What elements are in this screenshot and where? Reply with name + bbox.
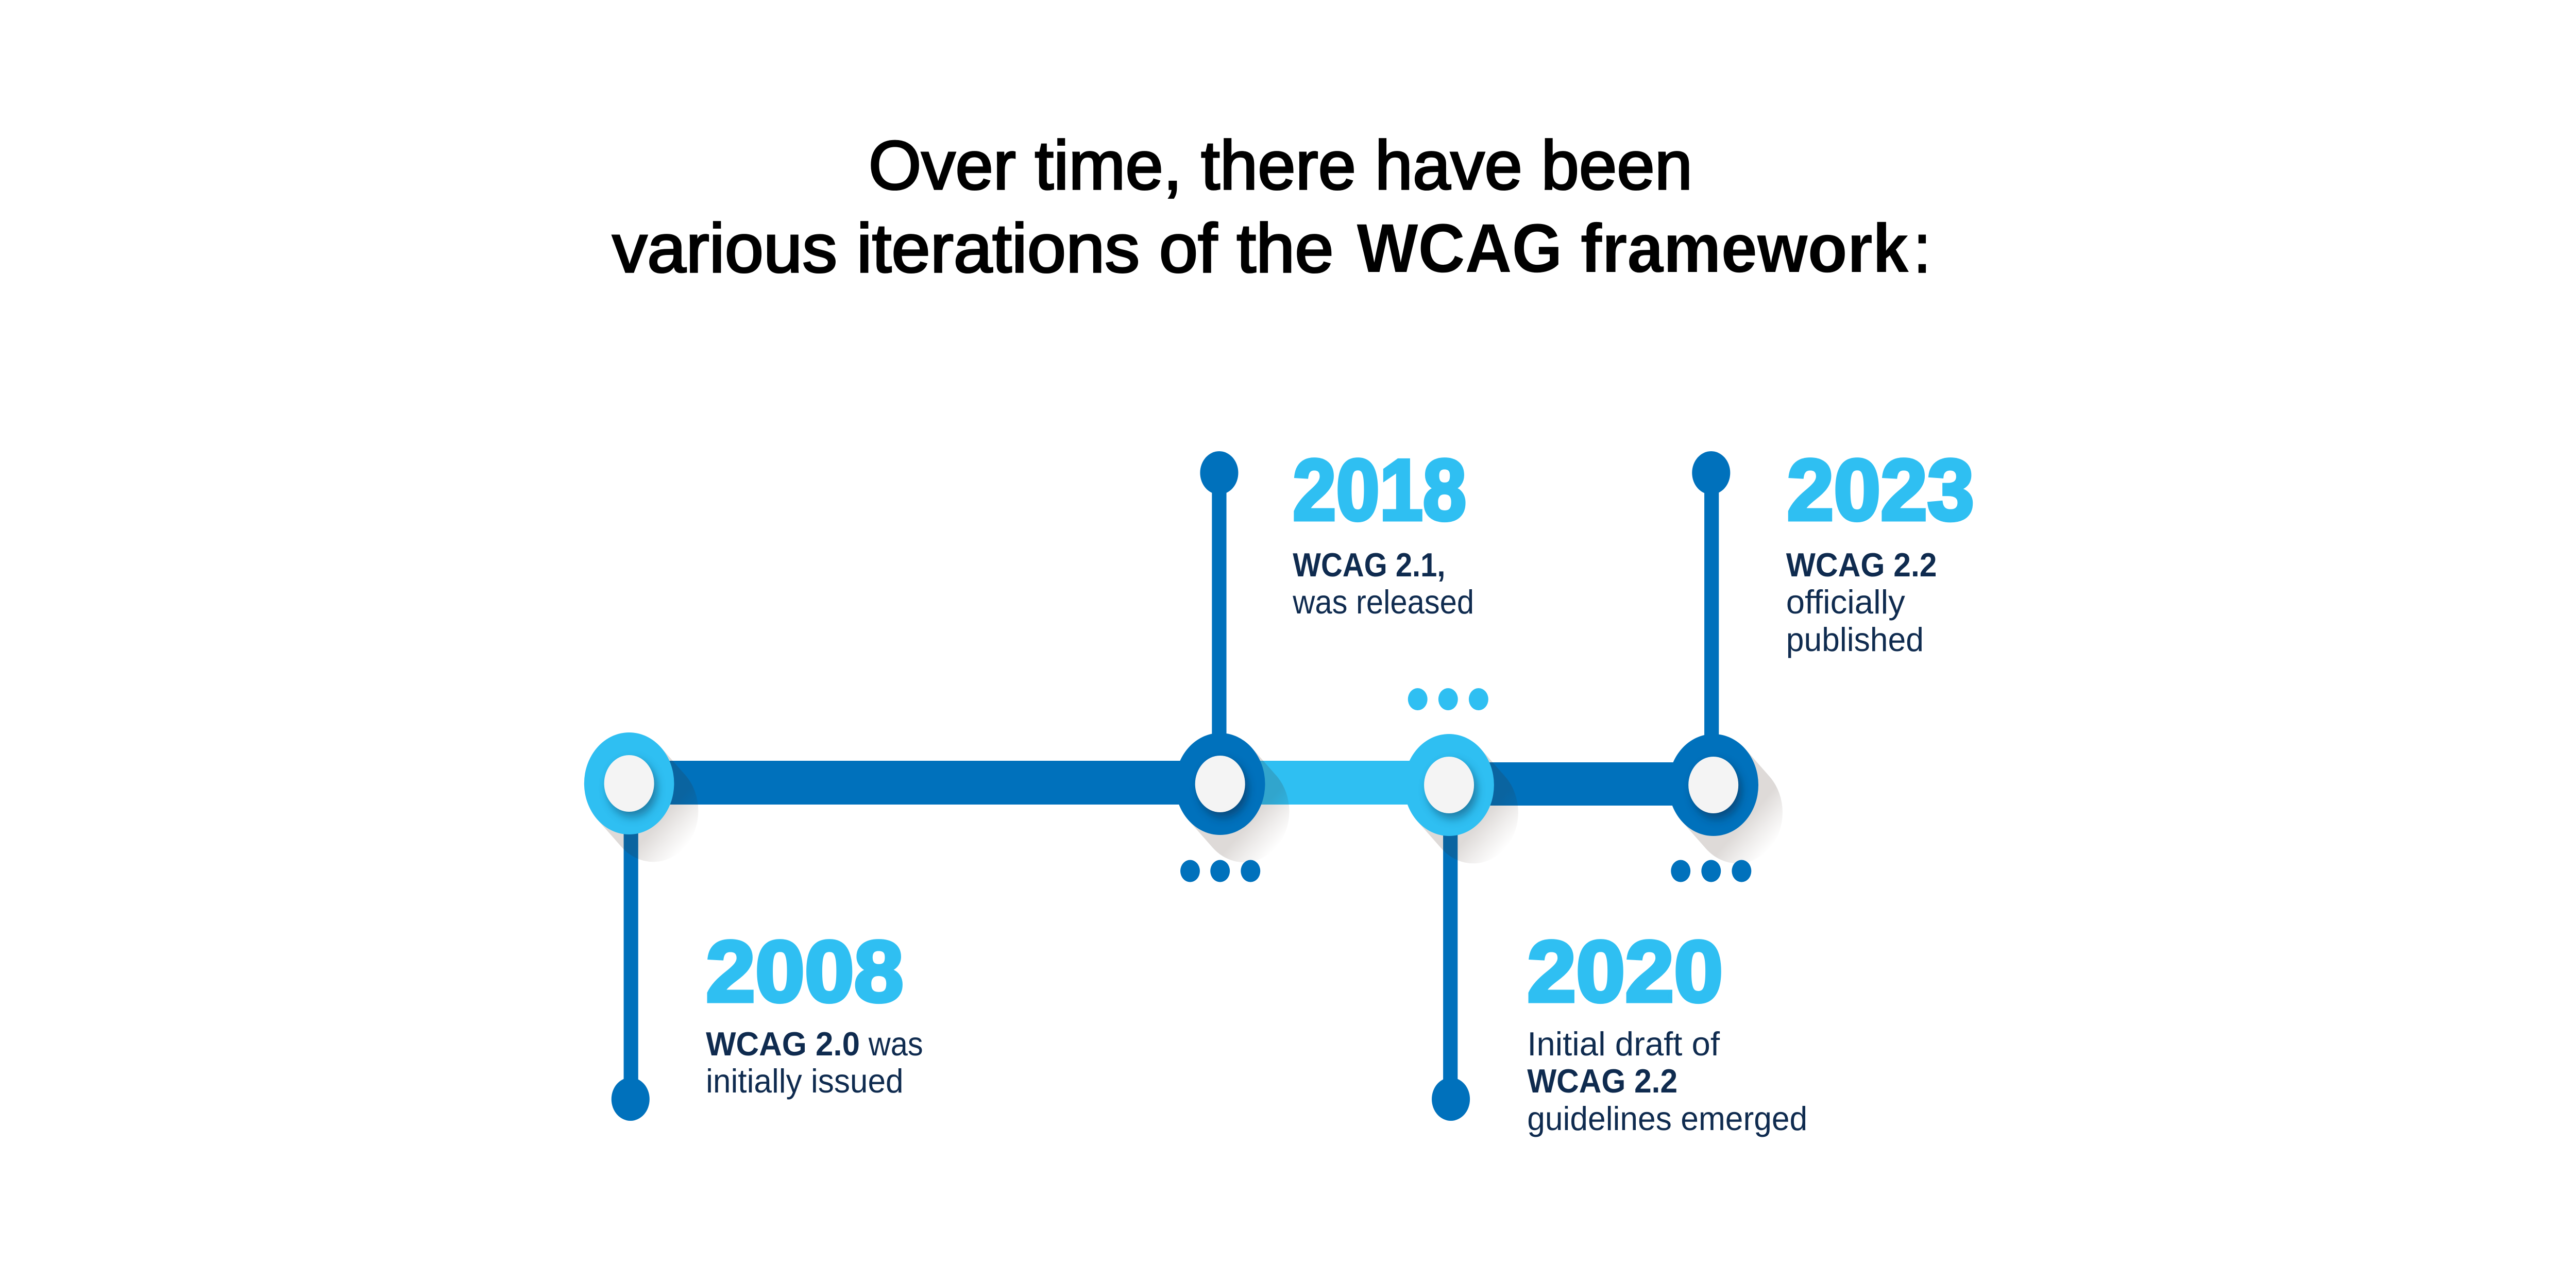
description: 2023 xyxy=(1786,546,1937,658)
year: 2018: 2018 xyxy=(1293,441,1466,538)
milestone: 2023 xyxy=(1786,441,1974,658)
description: 2008: initially issued xyxy=(706,1063,904,1100)
bar: 2018 to 2020 segment xyxy=(1220,761,1449,805)
description: 2020 xyxy=(1527,1026,1807,1137)
description: 2008: WCAG 2.0 xyxy=(706,1026,860,1063)
title xyxy=(613,127,1930,287)
node: 2023 xyxy=(1668,734,1783,863)
bar: 2020 to 2023 segment xyxy=(1449,762,1714,806)
dots: below 2023 node xyxy=(1671,860,1751,882)
milestone: 2018 xyxy=(1292,441,1474,621)
description: 2008 xyxy=(706,1026,923,1100)
bar: 2008 to 2018 segment xyxy=(629,761,1220,805)
stem and pin: 2020 xyxy=(1432,824,1470,1121)
milestone: 2008 xyxy=(706,923,923,1100)
description: 2023: officially xyxy=(1786,584,1905,621)
stem and pin: 2018 xyxy=(1200,451,1238,741)
timeline xyxy=(584,451,1783,1121)
title: Over time, there have been xyxy=(869,127,1692,204)
dots: above 2020 node xyxy=(1408,688,1488,710)
node: 2020 xyxy=(1404,734,1518,863)
year: 2008: 2008 xyxy=(706,923,904,1020)
description: 2020: WCAG 2.2 xyxy=(1527,1063,1677,1100)
stem and pin: 2008 xyxy=(612,824,650,1121)
milestone: 2020 xyxy=(1527,923,1807,1137)
description: 2020: guidelines emerged xyxy=(1527,1100,1807,1137)
description: 2018 xyxy=(1292,546,1474,621)
title: : xyxy=(1914,210,1930,287)
node: 2008 xyxy=(584,732,698,862)
year: 2023: 2023 xyxy=(1787,441,1974,538)
description: 2023: WCAG 2.2 xyxy=(1786,546,1937,584)
node: 2018 xyxy=(1175,733,1289,862)
title: WCAG framework xyxy=(1357,210,1909,287)
stem and pin: 2023 xyxy=(1692,451,1730,741)
description: 2023: published xyxy=(1786,621,1924,658)
year: 2020: 2020 xyxy=(1527,923,1723,1020)
description: 2008: was xyxy=(868,1026,923,1063)
description: 2018: was released xyxy=(1292,584,1474,621)
title: various iterations of the xyxy=(613,210,1334,287)
description: 2018: WCAG 2.1, xyxy=(1293,546,1446,584)
dots: below 2018 node xyxy=(1180,860,1260,882)
description: 2020: Initial draft of xyxy=(1527,1026,1720,1063)
